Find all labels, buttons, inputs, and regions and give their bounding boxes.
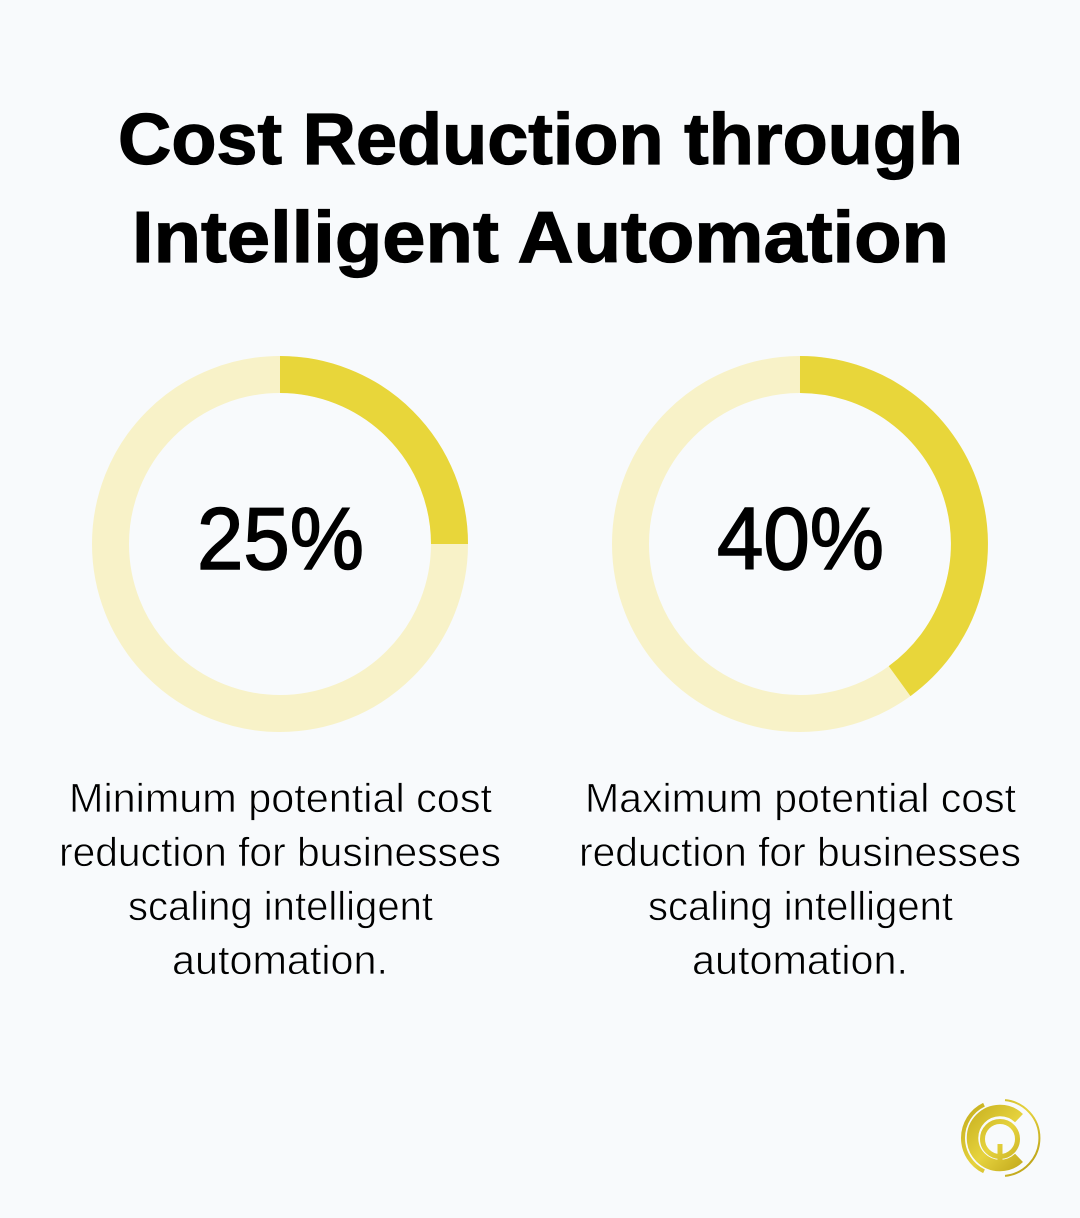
description: maximum: automation. bbox=[692, 937, 908, 983]
title: Intelligent Automation bbox=[132, 198, 949, 278]
description: minimum: Minimum potential cost bbox=[69, 775, 493, 821]
description: maximum: scaling intelligent bbox=[648, 883, 954, 929]
donut chart: 40% bbox=[630, 374, 970, 714]
icon: gold logo bbox=[963, 1100, 1039, 1176]
description: minimum bbox=[59, 775, 501, 983]
panel: 25% minimum bbox=[59, 374, 501, 983]
donut chart: 25% bbox=[110, 374, 450, 714]
panel: 40% maximum bbox=[579, 374, 1021, 983]
description: minimum: automation. bbox=[172, 937, 388, 983]
title: Cost Reduction through bbox=[118, 100, 963, 180]
description: minimum: scaling intelligent bbox=[128, 883, 434, 929]
description: maximum: Maximum potential cost bbox=[585, 775, 1017, 821]
title bbox=[118, 100, 963, 278]
value: 25%: 25% bbox=[197, 489, 364, 588]
description: maximum: reduction for businesses bbox=[579, 829, 1021, 875]
description: minimum: reduction for businesses bbox=[59, 829, 501, 875]
description: maximum bbox=[579, 775, 1021, 983]
value: 40%: 40% bbox=[717, 489, 884, 588]
